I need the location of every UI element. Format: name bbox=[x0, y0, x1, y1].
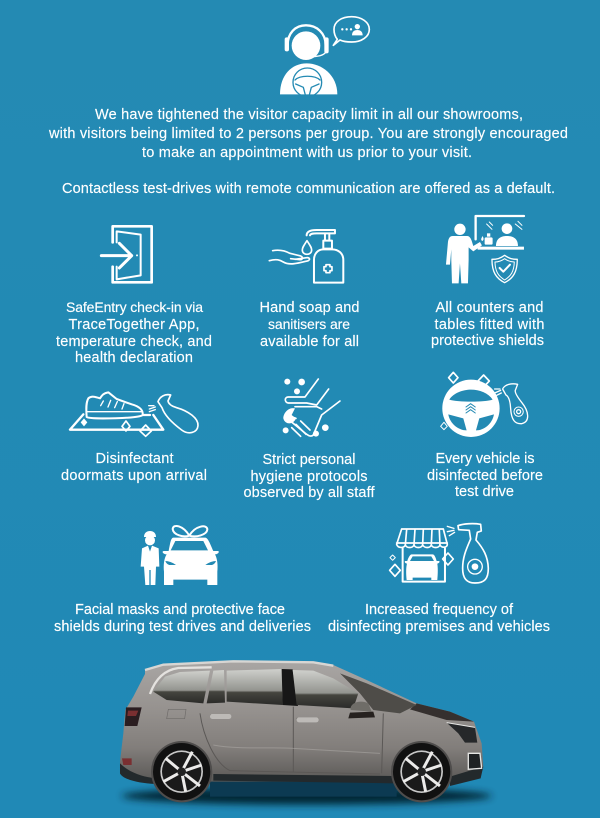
label: shields: tables fitted with bbox=[434, 317, 544, 333]
icon: person at counter with protective shield bbox=[446, 216, 524, 283]
icon: hand and sanitiser bottle bbox=[269, 230, 343, 283]
intro text: Contactless test-drives with remote communication are offered as a default. bbox=[62, 181, 555, 197]
label: safeentry: SafeEntry check-in via bbox=[66, 299, 203, 315]
label: vehicle disinfected: test drive bbox=[455, 484, 514, 500]
label: increased frequency: Increased frequency of bbox=[365, 602, 514, 618]
label: safeentry bbox=[56, 299, 212, 366]
label: vehicle disinfected bbox=[427, 451, 543, 500]
label: increased frequency: disinfecting premises and vehicles bbox=[328, 619, 550, 635]
label: facial masks: shields during test drives and deliveries bbox=[54, 619, 311, 635]
icon: shoe on disinfectant doormat with spray bbox=[70, 392, 198, 436]
label: shields bbox=[431, 300, 544, 349]
label: vehicle disinfected: disinfected before bbox=[427, 468, 543, 484]
intro text bbox=[48, 107, 568, 197]
intro text: with visitors being limited to 2 persons per group. You are strongly encouraged bbox=[48, 126, 568, 142]
label: increased frequency bbox=[328, 602, 550, 635]
label: vehicle disinfected: Every vehicle is bbox=[436, 451, 534, 467]
label: hand soap: sanitisers are bbox=[268, 316, 350, 332]
intro text: We have tightened the visitor capacity limit in all our showrooms, bbox=[95, 107, 523, 123]
label: safeentry: health declaration bbox=[75, 350, 193, 366]
label: shields: All counters and bbox=[436, 300, 544, 316]
icon: shopfront with car and spray bottle bbox=[390, 524, 488, 583]
label: hand soap: available for all bbox=[260, 334, 359, 350]
icon: headset agent with steering wheel and speech bubble bbox=[280, 17, 369, 97]
icon: staff beside car with gift bow bbox=[141, 526, 219, 585]
label: hand soap bbox=[260, 300, 360, 350]
label: hygiene: hygiene protocols bbox=[250, 469, 368, 485]
label: hand soap: Hand soap and bbox=[260, 300, 360, 316]
icon: hand washing with bubbles bbox=[283, 379, 340, 437]
label: doormats: Disinfectant bbox=[96, 451, 174, 467]
label: hygiene: observed by all staff bbox=[244, 485, 375, 501]
label: doormats bbox=[61, 451, 207, 484]
car: grey Citroen people carrier bbox=[120, 661, 492, 805]
front wheel bbox=[391, 741, 452, 802]
label: facial masks bbox=[54, 602, 311, 635]
label: safeentry: temperature check, and bbox=[56, 334, 212, 350]
label: safeentry: TraceTogether App, bbox=[68, 317, 200, 333]
label: doormats: doormats upon arrival bbox=[61, 468, 207, 484]
label: hygiene: Strict personal bbox=[262, 452, 356, 468]
icon: steering wheel with spray bbox=[441, 372, 528, 437]
label: facial masks: Facial masks and protective face bbox=[75, 602, 285, 618]
intro text: to make an appointment with us prior to your visit. bbox=[142, 145, 472, 161]
label: hygiene bbox=[244, 452, 375, 501]
icon: door entry arrow bbox=[101, 226, 152, 282]
label: shields: protective shields bbox=[431, 333, 544, 349]
rear wheel bbox=[151, 741, 212, 802]
